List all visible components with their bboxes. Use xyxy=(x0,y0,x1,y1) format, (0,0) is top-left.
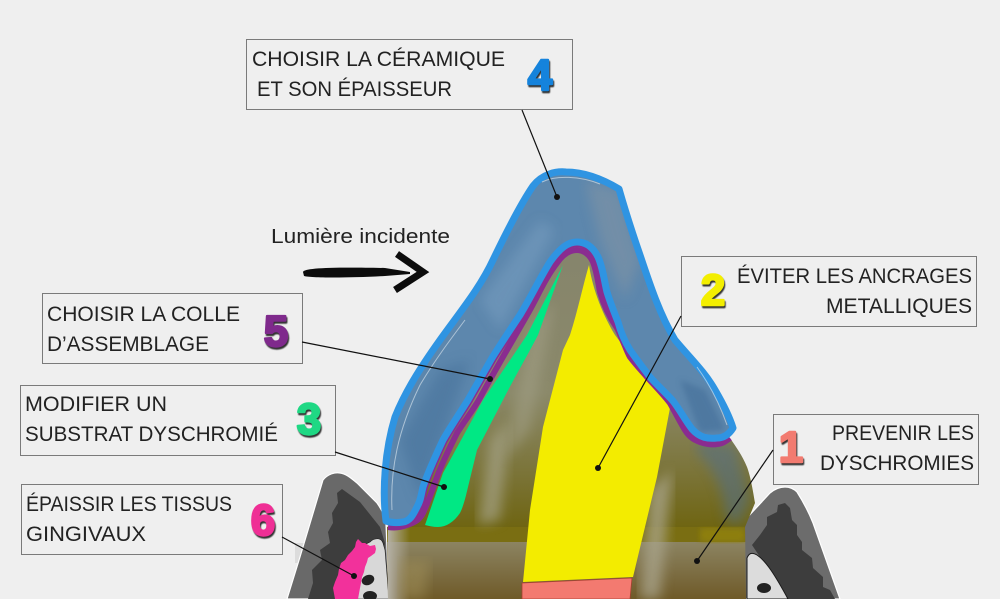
callout 1: dyschromia xyxy=(774,414,978,484)
label: incident light: Lumière incidente xyxy=(271,226,450,248)
callout 6: gingival tissue: GINGIVAUX xyxy=(26,523,146,546)
illustration: left neighbouring tooth xyxy=(287,473,389,599)
illustration: tooth root and dentin xyxy=(380,230,760,599)
leader line 2 xyxy=(595,316,681,471)
callout 1: dyschromia: DYSCHROMIES xyxy=(820,452,974,475)
leader line 4 xyxy=(522,110,560,200)
leader line 5 xyxy=(302,342,493,382)
illustration: right neighbouring tooth xyxy=(743,487,840,599)
callout 3: substrate: SUBSTRAT DYSCHROMIÉ xyxy=(25,423,278,446)
callout 4: ceramic: 4 xyxy=(528,51,553,100)
callout 5: bonding xyxy=(42,294,302,364)
callout 6: gingival tissue xyxy=(22,484,282,554)
callout 5: bonding: CHOISIR LA COLLE xyxy=(47,303,240,326)
callout 4: ceramic: ET SON ÉPAISSEUR xyxy=(257,78,452,101)
callout 6: gingival tissue: 6 xyxy=(251,496,275,545)
arrow: incident light xyxy=(303,254,423,290)
callout 3: substrate: MODIFIER UN xyxy=(25,393,167,416)
callout 2: metal anchors xyxy=(682,256,976,326)
gingival thickening: pink patch xyxy=(333,539,376,599)
callout 1: dyschromia: 1 xyxy=(779,423,803,472)
callout 2: metal anchors: METALLIQUES xyxy=(826,295,972,318)
leader line 3 xyxy=(335,452,447,490)
core base in red xyxy=(522,578,632,599)
callout 5: bonding: D’ASSEMBLAGE xyxy=(47,333,209,356)
callout 3: substrate: 3 xyxy=(297,395,321,444)
leader line 1 xyxy=(694,450,773,564)
callout 3: substrate xyxy=(20,386,336,456)
callout 4: ceramic xyxy=(246,40,572,110)
callout 2: metal anchors: 2 xyxy=(701,266,725,315)
ceramic veneer: crown with blue outline xyxy=(384,172,733,523)
leader line 6 xyxy=(282,537,357,579)
metal-free core in yellow xyxy=(523,265,670,582)
callout 5: bonding: 5 xyxy=(264,307,288,356)
callout 4: ceramic: CHOISIR LA CÉRAMIQUE xyxy=(252,48,505,71)
composite layer: masked dyschromic substrate in green xyxy=(425,265,563,527)
callout 1: dyschromia: PREVENIR LES xyxy=(832,422,974,445)
callout 2: metal anchors: ÉVITER LES ANCRAGES xyxy=(737,265,972,288)
callout 6: gingival tissue: ÉPAISSIR LES TISSUS xyxy=(26,493,232,516)
bonding layer: purple line xyxy=(388,242,730,527)
